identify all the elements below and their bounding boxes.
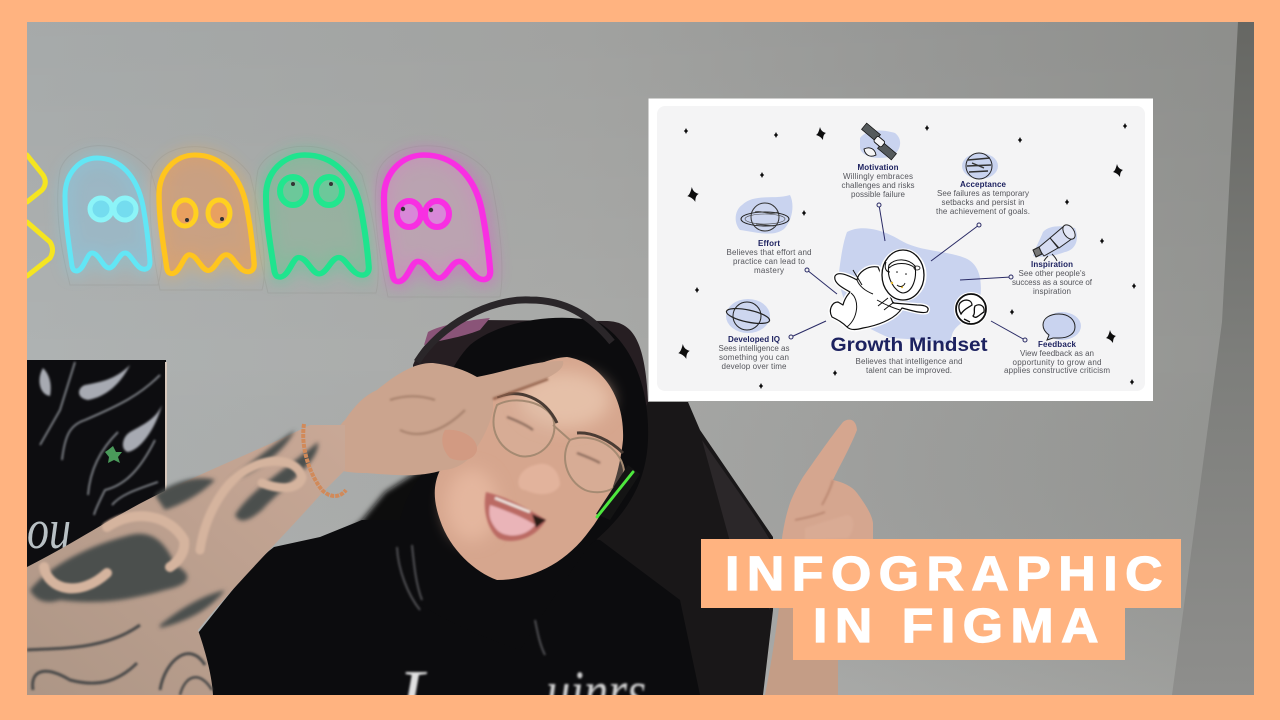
text: motivation: challenges and risks <box>842 181 914 190</box>
title: growth mindset: Growth Mindset <box>830 335 988 356</box>
satellite body <box>873 136 885 148</box>
text: feedback: applies constructive criticism <box>1004 366 1110 375</box>
shirt <box>198 520 700 695</box>
text: motivation: Motivation <box>858 163 899 172</box>
astronaut face <box>888 260 916 293</box>
knuckle creases <box>795 480 833 520</box>
text: inspiration <box>1012 260 1093 296</box>
green ghost <box>266 155 369 277</box>
icon: saturn <box>725 299 771 333</box>
infographic card <box>648 98 1153 401</box>
headband <box>417 300 612 362</box>
poster leaves <box>40 362 160 515</box>
nose <box>518 464 560 494</box>
cyan ghost <box>65 158 150 271</box>
text: motivation: Willingly embraces <box>843 172 913 181</box>
hair <box>421 318 648 540</box>
yellow neon shape <box>27 155 52 276</box>
caption: infographic <box>701 539 1181 608</box>
card inner panel <box>657 106 1145 391</box>
eyes <box>507 417 600 463</box>
connector lines <box>789 203 1027 342</box>
astronaut helmet <box>881 250 925 300</box>
orange ghost <box>159 155 254 274</box>
text: acceptance <box>936 180 1030 216</box>
magenta ghost <box>384 155 490 282</box>
caption: infographic: INFOGRAPHIC <box>725 548 1170 601</box>
text: acceptance: setbacks and persist in <box>942 198 1024 207</box>
text: inspiration: See other people's <box>1018 269 1086 278</box>
text: motivation <box>842 163 914 199</box>
text: feedback: Feedback <box>1038 340 1077 349</box>
earth planet <box>954 292 988 326</box>
person <box>27 300 873 720</box>
cheek highlight <box>446 469 498 541</box>
glasses <box>494 394 624 492</box>
text: feedback: View feedback as an <box>1020 349 1094 358</box>
text: inspiration: success as a source of <box>1012 278 1093 287</box>
text: effort <box>726 239 812 275</box>
central blob <box>838 228 981 344</box>
tattoo horn scales <box>44 461 302 588</box>
hair streaks <box>397 545 545 655</box>
text: motivation: possible failure <box>851 190 906 199</box>
poster on wall <box>27 360 167 570</box>
text: developed IQ <box>718 335 790 371</box>
face <box>435 357 623 580</box>
raised fist <box>336 361 563 475</box>
finger shadow <box>493 379 548 399</box>
text: effort: mastery <box>754 266 784 275</box>
tattoo shading <box>30 430 318 628</box>
text: developed IQ: something you can <box>719 353 789 362</box>
gaming chair <box>340 318 773 695</box>
poster petals <box>39 365 162 452</box>
text: acceptance: Acceptance <box>960 180 1007 189</box>
satellite panels <box>862 123 880 141</box>
thumb <box>805 515 853 540</box>
mouth <box>485 492 546 541</box>
stars <box>678 123 1136 389</box>
text: developed IQ: develop over time <box>722 362 787 371</box>
text: inspiration: Inspiration <box>1031 260 1073 269</box>
title: growth mindset <box>830 335 988 375</box>
text: acceptance: See failures as temporary <box>937 189 1029 198</box>
headset mic <box>596 470 635 519</box>
astronaut suit details <box>847 270 900 327</box>
chair shadow below fist <box>350 474 422 524</box>
pointing hand <box>765 420 873 695</box>
icon: acceptance planet <box>962 153 998 179</box>
satellite dish <box>864 148 876 156</box>
forearm <box>765 600 838 695</box>
astronaut suit <box>830 267 928 330</box>
icon: satellite <box>860 123 900 160</box>
text: acceptance: the achievement of goals. <box>936 207 1030 216</box>
bracelet <box>303 424 346 496</box>
tattoo lines <box>27 625 212 695</box>
text: effort: Believes that effort and <box>726 248 812 257</box>
text: feedback <box>1004 340 1110 375</box>
caption: in figma: IN FIGMA <box>813 600 1106 653</box>
title: growth mindset: talent can be improved. <box>866 366 952 375</box>
neon glow <box>65 155 490 282</box>
shirt lettering <box>404 670 646 695</box>
icon: speech bubble <box>1043 312 1081 340</box>
astronaut white halo <box>830 267 928 330</box>
text: feedback: opportunity to grow and <box>1012 358 1102 367</box>
icon: effort ringed planet <box>736 195 792 234</box>
text: inspiration: inspiration <box>1033 287 1071 296</box>
text: developed IQ: Developed IQ <box>728 335 780 344</box>
icon: telescope <box>1033 223 1078 261</box>
astronaut <box>830 250 928 330</box>
text: effort: Effort <box>758 239 780 248</box>
neon ghosts sign <box>27 146 502 297</box>
right wall corner wedge <box>1172 22 1254 695</box>
text: developed IQ: Sees intelligence as <box>718 344 790 353</box>
astronaut hair <box>885 262 915 272</box>
tattooed arm <box>27 425 345 695</box>
forehead highlight <box>520 372 610 428</box>
acrylic backing outlines <box>58 146 502 297</box>
text: effort: practice can lead to <box>733 257 806 266</box>
poster script lettering: ou <box>27 499 71 561</box>
title: growth mindset: Believes that intelligence and <box>856 357 962 366</box>
